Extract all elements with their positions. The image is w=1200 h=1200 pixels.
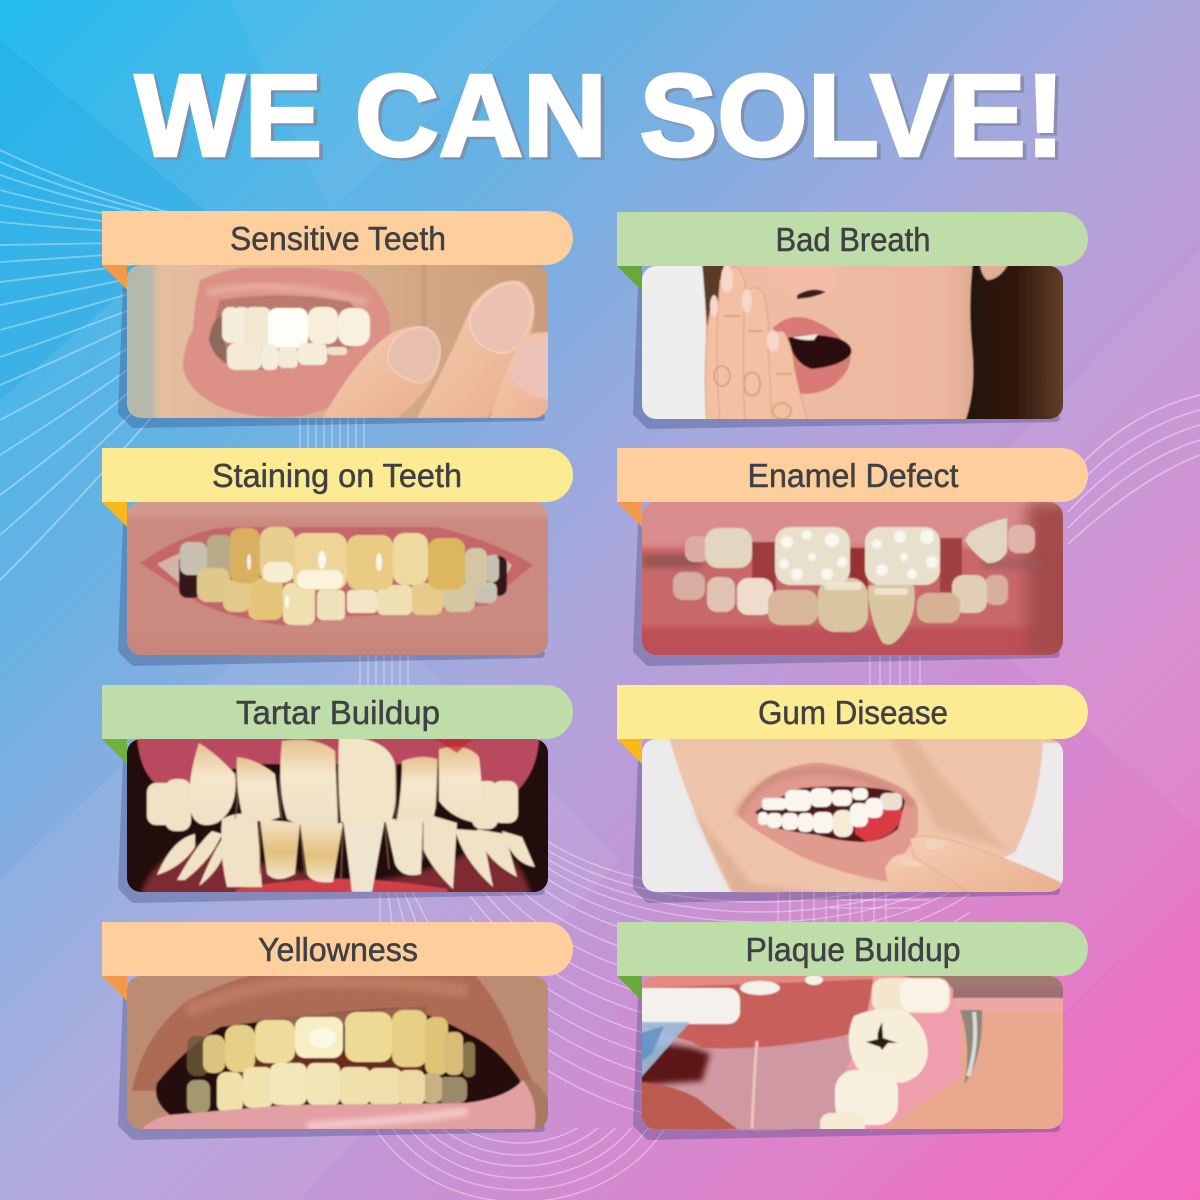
corner fold <box>102 265 127 290</box>
photo: yellowness <box>127 976 548 1129</box>
card shadow <box>122 996 541 1136</box>
banner: bad breath <box>617 212 1088 266</box>
card shadow <box>637 285 1056 425</box>
card shadow <box>122 759 541 899</box>
panel: plaque buildup <box>617 922 1088 1139</box>
corner fold <box>102 976 127 1001</box>
photo: enamel defect <box>642 502 1063 655</box>
card shadow <box>122 522 541 662</box>
panel: gum disease <box>617 685 1088 902</box>
label: gum disease: Gum Disease <box>758 694 948 731</box>
photo: tartar buildup <box>127 739 548 892</box>
photo: sensitive teeth <box>127 265 548 418</box>
label: plaque buildup: Plaque Buildup <box>746 931 960 968</box>
banner: sensitive teeth <box>102 211 573 265</box>
panel: bad breath <box>617 212 1088 429</box>
corner fold <box>102 739 127 764</box>
banner: yellowness <box>102 922 573 976</box>
banner: gum disease <box>617 685 1088 739</box>
label: staining on teeth: Staining on Teeth <box>212 457 462 494</box>
panel: staining on teeth <box>102 448 573 667</box>
photo: plaque buildup <box>642 976 1063 1129</box>
card shadow <box>637 996 1056 1136</box>
card shadow <box>122 285 541 424</box>
card shadow <box>637 522 1056 662</box>
corner fold <box>617 976 642 1001</box>
panel: sensitive teeth <box>102 211 573 428</box>
corner fold <box>102 502 127 527</box>
label: enamel defect: Enamel Defect <box>748 457 958 494</box>
card shadow <box>637 759 1056 899</box>
corner fold <box>617 502 642 527</box>
panel: enamel defect <box>617 448 1088 667</box>
label: sensitive teeth: Sensitive Teeth <box>230 220 446 257</box>
photo: bad breath <box>642 266 1063 419</box>
panel: tartar buildup <box>102 685 573 902</box>
title: WE CAN SOLVE! <box>138 53 1068 183</box>
banner: plaque buildup <box>617 922 1088 976</box>
title: WE CAN SOLVE! <box>135 50 1065 180</box>
photo: gum disease <box>642 739 1063 892</box>
photo: staining on teeth <box>127 502 548 655</box>
banner: staining on teeth <box>102 448 573 502</box>
corner fold <box>617 739 642 764</box>
banner: enamel defect <box>617 448 1088 502</box>
panel: yellowness <box>102 922 573 1139</box>
label: tartar buildup: Tartar Buildup <box>236 694 440 731</box>
corner fold <box>617 266 642 291</box>
banner: tartar buildup <box>102 685 573 739</box>
label: yellowness: Yellowness <box>258 931 418 968</box>
label: bad breath: Bad Breath <box>776 221 930 258</box>
